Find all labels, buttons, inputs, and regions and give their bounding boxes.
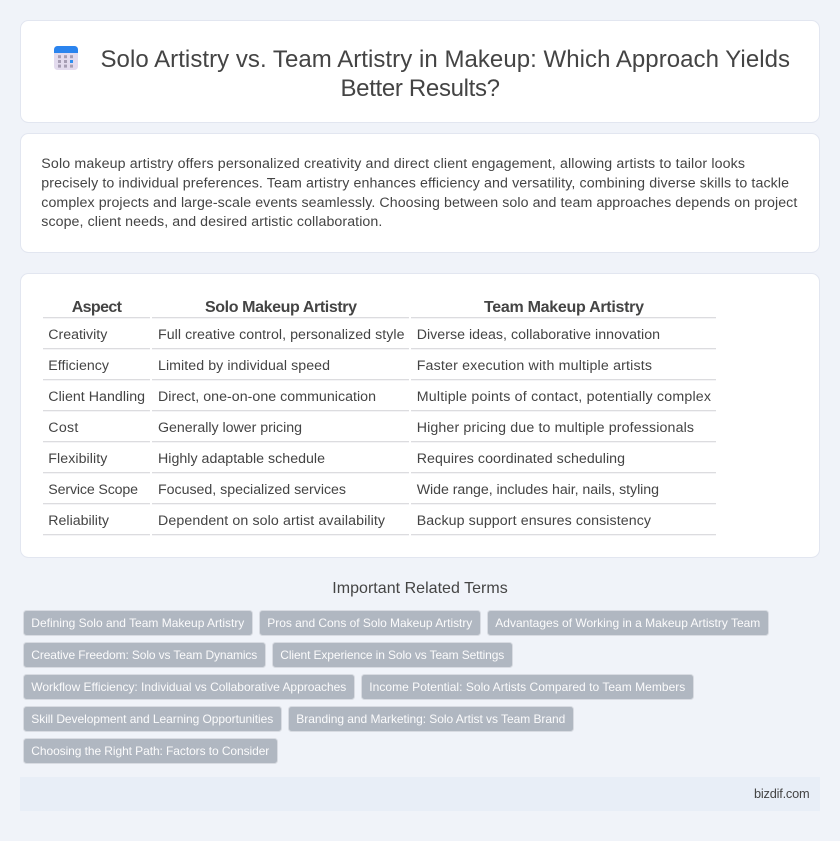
tag: Client Experience in Solo vs Team Settings — [280, 648, 504, 662]
table row: efficiency: Efficiency — [48, 358, 110, 374]
tag — [24, 610, 252, 636]
tag — [24, 738, 278, 764]
footer — [20, 777, 820, 811]
tag: Advantages of Working in a Makeup Artistry Team — [495, 616, 760, 630]
table header row: Aspect — [72, 299, 123, 316]
tag: Branding and Marketing: Solo Artist vs Team Brand — [296, 712, 565, 726]
tag — [288, 706, 574, 732]
tag: Skill Development and Learning Opportunities — [31, 712, 273, 726]
tag — [272, 642, 512, 668]
table header row: Team Makeup Artistry — [484, 299, 644, 316]
table row: flexibility: Highly adaptable schedule — [158, 451, 325, 467]
table row: reliability: Dependent on solo artist availability — [158, 513, 386, 529]
tag — [24, 642, 266, 668]
heading: related terms: Important Related Terms — [332, 580, 508, 597]
table row: cost: Higher pricing due to multiple professionals — [417, 420, 694, 436]
table row: client handling: Direct, one-on-one communication — [158, 389, 376, 405]
table row: flexibility: Flexibility — [48, 451, 108, 467]
table row: efficiency — [43, 358, 716, 380]
table row: client handling: Client Handling — [48, 389, 145, 405]
tag — [24, 706, 282, 732]
table row: efficiency: Faster execution with multiple artists — [417, 358, 652, 374]
table row: creativity: Full creative control, personalized style — [158, 327, 405, 343]
intro paragraph: complex projects and large-scale events seamlessly. Choosing between solo and team approaches depends on project — [41, 195, 797, 211]
table row: service scope: Wide range, includes hair, nails, styling — [417, 482, 659, 498]
table row: creativity: Diverse ideas, collaborative innovation — [417, 327, 660, 343]
tag — [362, 674, 694, 700]
tag — [260, 610, 480, 636]
panel: title card — [20, 20, 820, 122]
table row: cost — [43, 420, 716, 442]
title: Better Results? — [340, 75, 500, 102]
related terms tags — [24, 610, 768, 764]
table row: service scope: Service Scope — [48, 482, 138, 498]
title — [100, 46, 790, 102]
table row: reliability: Reliability — [48, 513, 110, 529]
table row: service scope — [43, 482, 716, 504]
panel: comparison table — [20, 274, 820, 558]
table row: reliability — [43, 513, 716, 535]
table row: creativity — [43, 327, 716, 349]
tag — [24, 674, 354, 700]
title: Solo Artistry vs. Team Artistry in Makeup: Which Approach Yields — [100, 46, 790, 73]
table header row: Solo Makeup Artistry — [205, 299, 357, 316]
intro paragraph: scope, client needs, and desired artistic collaboration. — [41, 214, 382, 230]
table row: client handling: Multiple points of contact, potentially complex — [417, 389, 711, 405]
panel: intro text — [20, 134, 820, 252]
tag: Creative Freedom: Solo vs Team Dynamics — [31, 648, 257, 662]
intro paragraph: Solo makeup artistry offers personalized creativity and direct client engagement, allowing artists to tailor looks — [41, 156, 745, 172]
table row: cost: Cost — [48, 420, 78, 436]
table row: efficiency: Limited by individual speed — [158, 358, 330, 374]
table row: flexibility: Requires coordinated scheduling — [417, 451, 625, 467]
table row: flexibility — [43, 451, 716, 473]
icon: calendar — [54, 46, 78, 70]
table row: cost: Generally lower pricing — [158, 420, 302, 436]
table row: client handling — [43, 389, 716, 411]
tag — [488, 610, 768, 636]
table row: creativity: Creativity — [48, 327, 108, 343]
tag: Income Potential: Solo Artists Compared to Team Members — [369, 680, 685, 694]
table row: service scope: Focused, specialized services — [158, 482, 346, 498]
footer: bizdif.com — [754, 786, 810, 801]
table row: reliability: Backup support ensures consistency — [417, 513, 652, 529]
intro paragraph — [41, 156, 797, 230]
tag: Workflow Efficiency: Individual vs Collaborative Approaches — [31, 680, 346, 694]
tag: Defining Solo and Team Makeup Artistry — [31, 616, 244, 630]
tag: Pros and Cons of Solo Makeup Artistry — [267, 616, 472, 630]
table header row — [43, 299, 716, 318]
tag: Choosing the Right Path: Factors to Consider — [31, 744, 269, 758]
intro paragraph: precisely to individual preferences. Team artistry enhances efficiency and versatility, combining diverse skills to tackle — [41, 176, 789, 192]
